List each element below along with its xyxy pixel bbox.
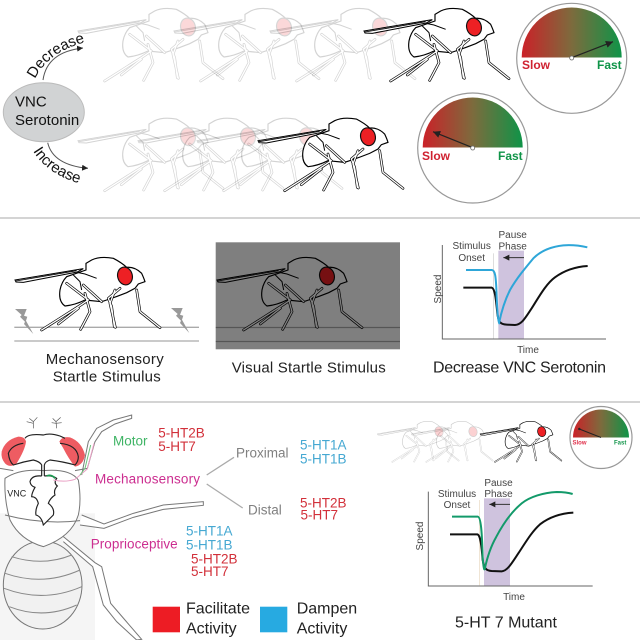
distal receptor labels: Distal	[248, 502, 282, 517]
panel: 5-HT7 mutant graph: 5-HT 7 Mutant	[455, 615, 558, 632]
panel: decrease VNC serotonin graph: Pause	[499, 230, 527, 241]
panel: visual startle stimulus: Visual Startle Stimulus	[232, 360, 386, 377]
panel: 5-HT7 mutant graph: Speed	[415, 522, 426, 550]
gauge: mutant: Slow	[572, 440, 587, 446]
proprioceptive receptor labels	[91, 524, 238, 579]
decrease label and arrow: Decrease	[26, 36, 84, 78]
VNC serotonin ellipse: VNC	[15, 94, 47, 111]
mechanosensory label: Mechanosensory	[95, 471, 200, 486]
legend: Activity	[186, 620, 237, 638]
proximal receptor labels: 5-HT1B	[300, 451, 347, 466]
legend: Activity	[297, 620, 347, 638]
proximal receptor labels: Proximal	[236, 445, 289, 460]
middle leg	[80, 502, 203, 528]
divider bottom	[0, 401, 640, 403]
legend	[153, 600, 357, 638]
gauge: slow: Fast	[498, 149, 523, 163]
fly sequence: 5-HT7 mutant	[377, 421, 561, 462]
panel: decrease VNC serotonin graph: Phase	[499, 242, 527, 252]
legend: Dampen	[297, 600, 357, 618]
motor receptor labels	[113, 426, 205, 454]
gauge: mutant: Fast	[614, 440, 626, 446]
fly anatomy diagram	[0, 415, 203, 640]
panel: decrease VNC serotonin graph: Time	[517, 345, 539, 356]
panel: 5-HT7 mutant graph: Onset	[444, 500, 471, 511]
panel: mechanosensory startle stimulus	[14, 257, 199, 386]
motor receptor labels: 5-HT7	[158, 439, 196, 454]
increase label and arrow: Increase	[34, 146, 80, 182]
eyes	[1, 437, 26, 466]
abdomen	[3, 541, 82, 629]
panel: 5-HT7 mutant graph: Stimulus	[438, 489, 476, 500]
connector lines	[207, 457, 243, 508]
gauge: mutant	[570, 406, 632, 468]
motor receptor labels: Motor	[113, 433, 148, 448]
VNC serotonin ellipse: Serotonin	[15, 112, 79, 129]
proprioceptive receptor labels: 5-HT1B	[186, 537, 233, 552]
panel: mechanosensory startle stimulus: Startle Stimulus	[53, 369, 161, 386]
distal receptor labels: 5-HT7	[300, 507, 338, 522]
gauge: slow	[418, 93, 528, 203]
panel: decrease VNC serotonin graph: Decrease VNC Serotonin	[433, 360, 606, 377]
proprioceptive receptor labels: Proprioceptive	[91, 536, 178, 551]
panel: mechanosensory startle stimulus: Mechanosensory	[46, 351, 164, 368]
proximal receptor labels: 5-HT1A	[300, 437, 347, 452]
proprioceptive receptor labels: 5-HT2B	[191, 551, 238, 566]
panel: decrease VNC serotonin graph: Stimulus	[453, 241, 491, 252]
thorax	[5, 470, 80, 547]
panel: decrease VNC serotonin graph	[433, 230, 606, 377]
panel: 5-HT7 mutant graph: Pause	[484, 478, 513, 489]
VNC outline	[30, 476, 57, 525]
panel: decrease VNC serotonin graph: Speed	[433, 275, 444, 303]
panel: decrease VNC serotonin graph: Onset	[458, 253, 485, 264]
VNC serotonin ellipse	[3, 83, 84, 142]
distal receptor labels: 5-HT2B	[300, 495, 347, 510]
gauge: slow: Slow	[422, 149, 451, 163]
nerves	[53, 443, 94, 481]
distal receptor labels	[248, 495, 347, 522]
proprioceptive receptor labels: 5-HT7	[191, 564, 229, 579]
proprioceptive receptor labels: 5-HT1A	[186, 524, 233, 539]
gauge: fast: Slow	[522, 58, 551, 72]
gauge: fast: Fast	[597, 58, 622, 72]
panel: 5-HT7 mutant graph	[415, 478, 593, 632]
antennae	[27, 417, 62, 428]
fly sequence: increase serotonin	[78, 118, 403, 191]
proximal receptor labels	[236, 437, 347, 466]
fly sequence: decrease serotonin	[78, 8, 509, 81]
gauge: fast	[517, 3, 627, 113]
upper leg	[82, 415, 132, 475]
panel: visual startle stimulus	[216, 242, 400, 377]
legend: Facilitate	[186, 600, 250, 618]
divider top	[0, 217, 640, 219]
panel: 5-HT7 mutant graph: Phase	[484, 489, 513, 500]
hind leg	[63, 537, 142, 640]
panel: 5-HT7 mutant graph: Time	[503, 592, 525, 603]
motor receptor labels: 5-HT2B	[158, 426, 205, 441]
brain outline	[8, 434, 78, 476]
VNC label: VNC	[7, 489, 27, 499]
